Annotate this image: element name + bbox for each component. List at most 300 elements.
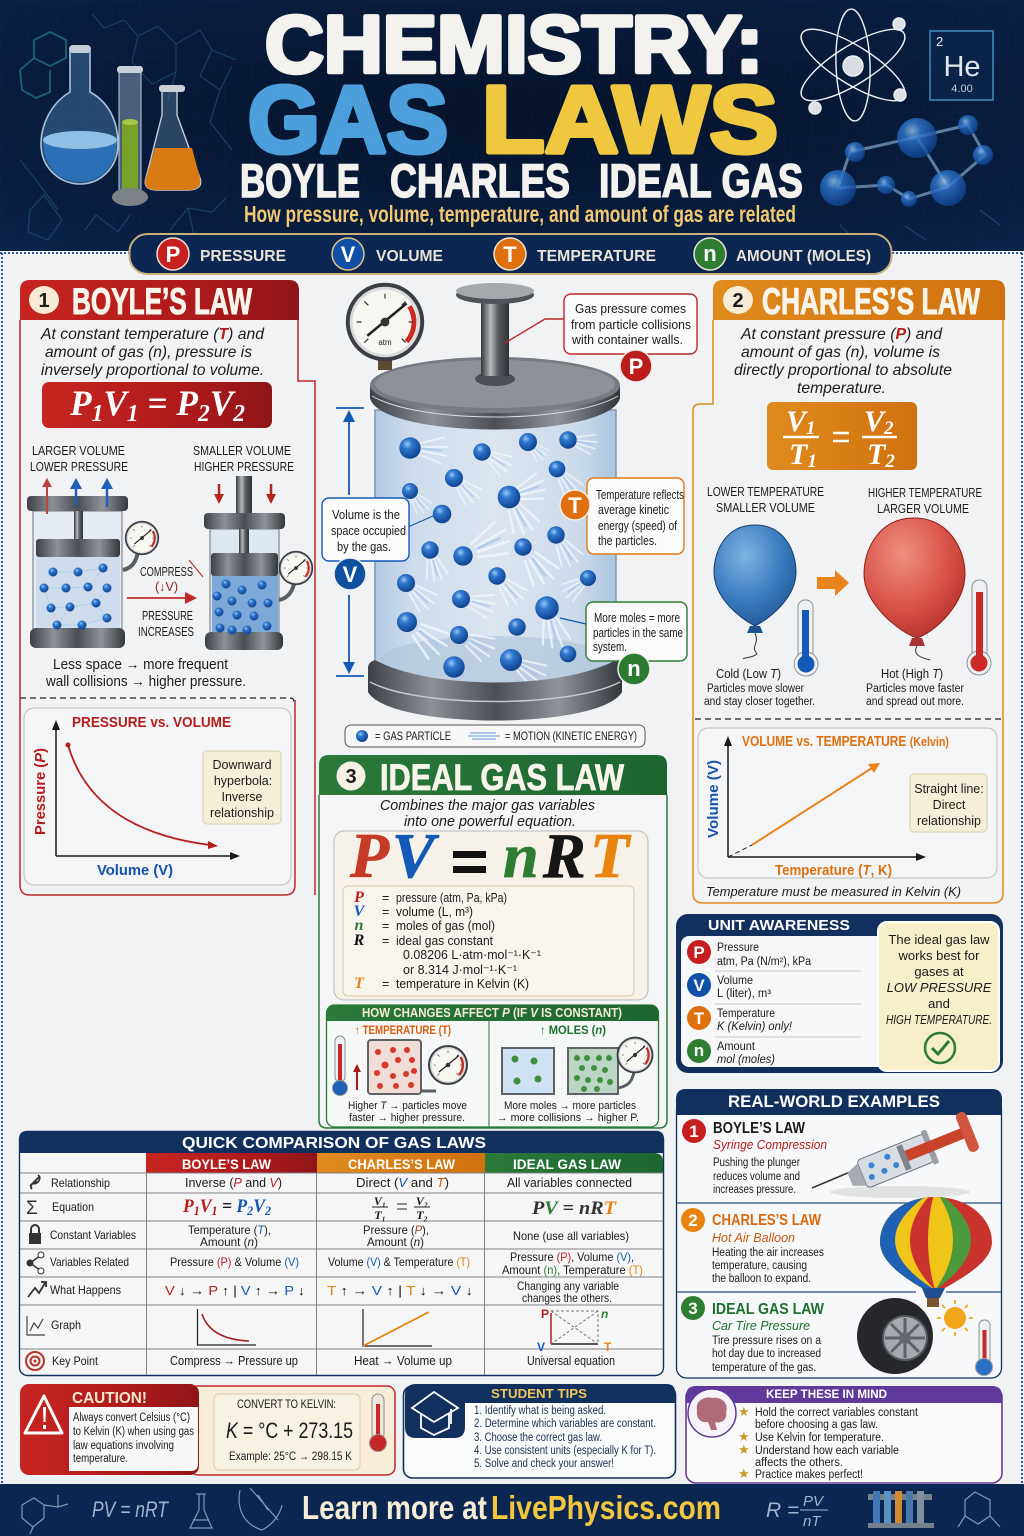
formula: V1/T1 = V2/T2: 2: [883, 418, 894, 439]
variable key: =: [382, 891, 389, 905]
formula: PV = nRT: n: [503, 820, 539, 891]
label: larger volume: [30, 443, 128, 474]
unit: temperature: K (Kelvin) only!: [717, 1021, 793, 1033]
row: equation: =: [218, 1196, 236, 1217]
icon: brain: [688, 1389, 736, 1437]
formula: V1/T1 = V2/T2: 2: [884, 451, 895, 472]
legend: particle and motion: = GAS PARTICLE: [375, 731, 451, 743]
callout: best conditions: works best for: [898, 948, 980, 963]
legend: temperature: [494, 238, 656, 270]
chart: volume vs temperature: VOLUME vs. TEMPERATURE (Kelvin): [742, 734, 949, 750]
unit: pressure: [687, 940, 812, 968]
example: Boyle syringe text: 1: [689, 1122, 699, 1141]
title: [240, 0, 803, 207]
label: lower temperature: [707, 484, 824, 515]
legend: particle and motion: [345, 725, 645, 747]
callout: hyperbola: Inverse: [222, 790, 263, 804]
row: key point: Compress → Pressure up: [170, 1354, 298, 1368]
formula: P1V1 = P2V2: V: [103, 383, 130, 423]
piston rod and knob: [456, 283, 534, 386]
callout: volume: [322, 408, 433, 676]
icon: warning triangle: [25, 1396, 62, 1433]
element card: helium: [930, 31, 993, 100]
unit: amount: Amount: [717, 1039, 756, 1053]
particle motion streaks: [405, 432, 598, 690]
example: Boyle syringe text: increases pressure.: [713, 1184, 796, 1196]
row: what happens: T ↑ → V ↑ | T ↓ → V ↓: [327, 1283, 473, 1298]
mini chart: inverse: [198, 1309, 256, 1345]
text: cold caption: [704, 666, 815, 708]
list: reminders: before choosing a gas law.: [755, 1419, 878, 1431]
formula: V1/T1 = V2/T2: 1: [806, 418, 816, 439]
callout: temperature: T: [568, 493, 582, 518]
formula: P1V1 = P2V2: P: [70, 383, 92, 423]
legend: particle and motion: = MOTION (KINETIC ENERGY): [505, 731, 637, 743]
list: reminders: affects the others.: [755, 1457, 843, 1469]
title: CHEMISTRY:: [265, 0, 763, 90]
row: equation: [26, 1194, 617, 1222]
variable key: temperature in Kelvin (K): [396, 977, 529, 991]
table column headers: [146, 1153, 663, 1173]
panel: caution: [20, 1384, 395, 1475]
arrow: temperature increase: [817, 570, 849, 596]
unit: pressure: P: [693, 943, 705, 962]
variable key: volume (L, m³): [396, 905, 473, 919]
row: what happens: [28, 1279, 619, 1305]
icon: test tube rack: [868, 1491, 934, 1528]
example: Boyle syringe text: reduces volume and: [713, 1171, 800, 1183]
row: equation: P: [182, 1196, 218, 1218]
legend: pressure: [157, 238, 286, 270]
text: cold caption: Particles move slower: [707, 683, 804, 695]
list: student tips: 4. Use consistent units (especially K for T).: [474, 1445, 656, 1457]
example: Boyle syringe text: [682, 1119, 827, 1196]
heading: unit awareness: UNIT AWARENESS: [708, 918, 850, 934]
callout: straight line: Direct: [933, 798, 966, 812]
row: constant variables: Amount (n): [367, 1235, 424, 1249]
callout: temperature: Temperature reflects: [596, 487, 684, 502]
mini chart: all variables: T: [604, 1340, 612, 1354]
text: ideal gas intro: into one powerful equation.: [404, 814, 576, 830]
element card: helium: He: [943, 51, 981, 83]
example: Boyle syringe text: BOYLE’S LAW: [713, 1120, 806, 1137]
diagram: expanded cylinder: [27, 478, 159, 648]
scenario: raise temperature: ↑ TEMPERATURE (T): [355, 1023, 451, 1037]
formula: V1/T1 = V2/T2: T: [867, 438, 885, 471]
row: equation: 2: [246, 1203, 254, 1218]
title: GAS: [248, 67, 448, 173]
icon: hot air balloon: [880, 1197, 992, 1307]
callout: hyperbola: Downward: [212, 758, 272, 772]
label: higher temperature: HIGHER TEMPERATURE: [868, 485, 982, 500]
heading: ideal gas law: IDEAL GAS LAW: [380, 757, 624, 798]
text: Charles definition: temperature.: [797, 380, 886, 397]
callout: pressure: with container walls.: [571, 332, 683, 347]
row: key point: Heat → Volume up: [354, 1354, 452, 1368]
heading: student tips: STUDENT TIPS: [491, 1386, 587, 1401]
row: equation: T₁: [374, 1208, 386, 1222]
call to action: Learn more at: [302, 1489, 487, 1526]
example: Charles balloon text: 2: [688, 1211, 698, 1230]
chart: volume vs temperature: Temperature (T, K): [775, 862, 892, 879]
list: reminders: ★: [738, 1429, 750, 1444]
callout: hyperbola: hyperbola:: [214, 774, 272, 788]
callout: best conditions: and: [928, 996, 950, 1011]
icon: blue balloon: [714, 525, 796, 659]
text: caution body: [73, 1412, 194, 1465]
text: Charles definition: amount of gas (n), volume is: [741, 344, 940, 361]
legend: amount: n: [703, 241, 717, 266]
row: variables related: Variables Related: [50, 1255, 129, 1269]
variable key: ideal gas constant: [396, 934, 494, 948]
table column headers: CHARLES’S LAW: [348, 1156, 456, 1172]
heading: ideal gas law: 3: [345, 766, 357, 788]
legend bar: [130, 234, 892, 274]
element card: helium: 2: [936, 34, 943, 49]
text: cold caption: and stay closer together.: [704, 696, 815, 708]
example: ideal gas tire text: IDEAL GAS LAW: [712, 1301, 825, 1318]
label: higher temperature: LARGER VOLUME: [877, 501, 969, 516]
formula doodle: R = PV/nT: PV: [803, 1493, 825, 1510]
panel: unit awareness: [676, 914, 1003, 1073]
variable key: =: [382, 905, 389, 919]
icon: red balloon: [864, 518, 965, 660]
cylinder base: [368, 660, 622, 720]
callout: best conditions: gases at: [914, 964, 964, 979]
row: variables related: Pressure (P), Volume (V),: [510, 1250, 634, 1264]
heading: table title: QUICK COMPARISON OF GAS LAWS: [182, 1135, 486, 1152]
scenario: add moles: More moles → more particles: [504, 1100, 636, 1112]
callout: pressure: P: [629, 354, 643, 379]
callout: straight line: [910, 774, 987, 832]
unit: amount: n: [694, 1041, 704, 1060]
text: Boyle definition: [40, 326, 265, 379]
scenario: raise temperature: faster → higher pressure.: [349, 1112, 465, 1124]
chart: pressure vs volume: Pressure (P): [32, 748, 49, 835]
callout: volume: Volume is the: [332, 507, 400, 522]
text: caution body: Always convert Celsius (°C): [73, 1412, 190, 1424]
row: equation: P: [235, 1196, 271, 1218]
variable key: pressure (atm, Pa, kPa): [396, 891, 507, 905]
example: ideal gas tire text: [681, 1296, 825, 1374]
row: constant variables: Temperature (T),: [188, 1223, 271, 1237]
text: Boyle explanation: wall collisions → higher pressure.: [45, 674, 246, 690]
row: key point: Universal equation: [527, 1354, 615, 1368]
example: Charles balloon text: CHARLES’S LAW: [712, 1212, 822, 1229]
unit: temperature: T: [694, 1009, 705, 1028]
text: caution body: to Kelvin (K) when using gas: [73, 1426, 194, 1438]
callout: pressure: from particle collisions: [571, 317, 691, 332]
row: variables related: Pressure (P) & Volume (V): [170, 1255, 299, 1269]
text: Charles definition: directly proportional to absolute: [734, 362, 952, 379]
row: equation: 2: [264, 1203, 271, 1218]
legend: volume: VOLUME: [376, 248, 443, 265]
icon: lab flasks: [41, 45, 201, 206]
header banner: [0, 0, 1024, 251]
formula: P1V1 = P2V2: 2: [197, 401, 210, 427]
callout: volume: V: [343, 562, 358, 587]
icon: atom: [792, 8, 914, 122]
row: variables related: Volume (V) & Temperature (T): [328, 1255, 470, 1269]
example: ideal gas tire text: hot day due to increased: [712, 1348, 821, 1360]
mini chart: all variables: P: [541, 1307, 549, 1321]
list: reminders: ★: [738, 1442, 750, 1457]
label: higher temperature: [868, 485, 982, 516]
list: student tips: 5. Solve and check your answer!: [474, 1458, 614, 1470]
heading: table title: [19, 1131, 664, 1153]
diagram: compressed cylinder: [204, 476, 313, 650]
callout: best conditions: LOW PRESSURE: [887, 980, 992, 995]
variable key: T: [354, 975, 365, 992]
heading: Boyle's law: 1: [38, 290, 50, 312]
subpanel: how changes affect pressure: [326, 1005, 658, 1127]
element card: helium: 4.00: [951, 83, 973, 95]
variable key: moles of gas (mol): [396, 919, 495, 933]
subpanel: how changes affect pressure: HOW CHANGES AFFECT P (IF V IS CONSTANT): [362, 1006, 622, 1020]
legend: amount: AMOUNT (MOLES): [736, 248, 871, 265]
unit: pressure: Pressure: [717, 940, 759, 954]
example: ideal gas tire text: temperature of the gas.: [712, 1362, 816, 1374]
list: reminders: ★: [738, 1404, 750, 1419]
row: equation: V₂: [416, 1194, 428, 1208]
diagram: central gas cylinder: [346, 283, 622, 720]
label: compress arrow: INCREASES: [138, 625, 194, 639]
example: Charles balloon text: temperature, causing: [712, 1260, 807, 1272]
unit: volume: Volume: [717, 973, 753, 987]
heading: keep in mind: KEEP THESE IN MIND: [766, 1387, 887, 1401]
row: graph: Graph: [51, 1318, 81, 1332]
callout: temperature: energy (speed) of: [598, 518, 677, 533]
icon: thermometer: [976, 1320, 992, 1376]
heading: Boyle's law: BOYLE’S LAW: [72, 281, 252, 322]
row: relationship: [30, 1175, 632, 1190]
text: ideal gas intro: [380, 798, 595, 830]
formula: Kelvin conversion: [214, 1394, 360, 1470]
row: equation: PV = nRT: [531, 1198, 617, 1219]
scenario: add moles: ↑ MOLES (n): [540, 1023, 606, 1037]
row: key point: [26, 1352, 615, 1370]
title: LAWS: [482, 67, 778, 173]
text: hot caption: [866, 666, 964, 708]
unit: volume: L (liter), m³: [717, 988, 771, 1000]
chart: pressure vs volume: [24, 708, 291, 885]
callout: best conditions: The ideal gas law: [888, 932, 990, 947]
unit: temperature: Temperature: [717, 1006, 775, 1020]
row: constant variables: [29, 1223, 629, 1249]
row: relationship: Relationship: [51, 1176, 110, 1190]
row: constant variables: None (use all variables): [513, 1229, 629, 1243]
formula: PV = nRT: P: [349, 820, 390, 891]
row: constant variables: Constant Variables: [50, 1228, 136, 1242]
unit: amount: mol (moles): [717, 1054, 775, 1066]
variable key: or 8.314 J·mol⁻¹·K⁻¹: [403, 963, 517, 977]
variable key: R: [353, 932, 365, 949]
label: lower temperature: SMALLER VOLUME: [716, 500, 815, 515]
list: student tips: 1. Identify what is being asked.: [474, 1405, 606, 1417]
list: student tips: [474, 1405, 656, 1470]
icon: molecule: [820, 115, 993, 207]
icon: graduation cap: [412, 1392, 458, 1435]
unit: volume: V: [693, 976, 705, 995]
label: smaller volume: HIGHER PRESSURE: [194, 459, 294, 474]
chart: pressure vs volume: PRESSURE vs. VOLUME: [72, 715, 231, 731]
row: variables related: [26, 1250, 643, 1277]
table column headers: IDEAL GAS LAW: [513, 1156, 622, 1172]
callout: temperature: average kinetic: [598, 502, 669, 517]
list: reminders: Practice makes perfect!: [755, 1469, 863, 1481]
variable key: [343, 886, 634, 996]
example: Charles balloon text: Heating the air increases: [712, 1247, 824, 1259]
row: equation: Equation: [52, 1200, 94, 1214]
formula: P1V1 = P2V2: = P: [139, 383, 199, 423]
example: ideal gas tire text: Tire pressure rises on a: [712, 1335, 822, 1347]
heading: real-world examples: REAL-WORLD EXAMPLES: [728, 1093, 940, 1111]
row: relationship: All variables connected: [507, 1176, 632, 1190]
gas particles: [397, 431, 596, 678]
text: Charles definition: [734, 326, 952, 397]
row: relationship: Inverse (P and V): [185, 1176, 282, 1190]
list: reminders: Understand how each variable: [755, 1445, 899, 1457]
heading: Charles's law: 2: [732, 290, 744, 312]
row: constant variables: Amount (n): [200, 1235, 258, 1249]
icon: hot thermometer: [967, 580, 991, 675]
formula doodle: R = PV/nT: [766, 1493, 828, 1530]
list: reminders: Hold the correct variables constant: [755, 1407, 919, 1419]
pressure gauge: [346, 283, 424, 370]
variable key: =: [382, 934, 389, 948]
icon: sun: [937, 1300, 973, 1336]
icon: cold thermometer: [794, 600, 818, 676]
unit: temperature: [687, 1006, 793, 1033]
text: cold caption: Cold (Low T): [716, 666, 781, 681]
row: equation: V: [253, 1196, 266, 1217]
label: compress arrow: COMPRESS: [140, 565, 193, 579]
list: student tips: 3. Choose the correct gas law.: [474, 1432, 602, 1444]
formula: P1V1 = P2V2: V: [210, 383, 236, 423]
panel: real-world examples: [676, 1089, 1002, 1378]
callout: moles: More moles = more: [594, 610, 680, 625]
formula doodle: PV = nRT: PV = nRT: [92, 1497, 169, 1522]
mini chart: all variables: n: [601, 1307, 608, 1321]
panel: student tips: [404, 1384, 676, 1478]
variable key: P: [353, 889, 364, 906]
footer doodles: [22, 1488, 1000, 1534]
formula: V1/T1 = V2/T2: V: [786, 405, 806, 438]
text: Boyle definition: At constant temperature (T) and: [40, 326, 265, 343]
variable key: 0.08206 L·atm·mol⁻¹·K⁻¹: [403, 948, 541, 962]
legend: amount: [694, 238, 871, 270]
row: what happens: Changing any variable: [517, 1279, 619, 1293]
scenario: raise temperature: [332, 1023, 468, 1124]
callout: temperature: [560, 478, 684, 554]
callout: straight line: relationship: [917, 814, 981, 828]
example: Boyle syringe text: Pushing the plunger: [713, 1157, 800, 1169]
legend: volume: [332, 238, 443, 270]
mini chart: all variables: [537, 1307, 612, 1354]
row: graph: [27, 1307, 612, 1354]
text: Boyle definition: inversely proportional to volume.: [41, 362, 264, 379]
formula: PV = nRT: V: [392, 820, 440, 891]
formula: V1/T1 = V2/T2: 1: [807, 451, 817, 472]
text: caution body: temperature.: [73, 1453, 128, 1465]
example: Boyle syringe text: Syringe Compression: [713, 1137, 827, 1152]
cylinder lid: [370, 357, 620, 430]
callout: hyperbola: relationship: [210, 806, 274, 820]
title: BOYLE: [240, 154, 360, 207]
callout: straight line: Straight line:: [914, 782, 984, 796]
row: key point: Key Point: [52, 1354, 99, 1368]
list: reminders: Use Kelvin for temperature.: [755, 1432, 884, 1444]
example: Charles balloon text: Hot Air Balloon: [712, 1230, 795, 1245]
label: smaller volume: SMALLER VOLUME: [193, 443, 291, 458]
unit: amount: [687, 1039, 775, 1066]
list: reminders: ★: [738, 1466, 750, 1481]
formula: Kelvin conversion: Example: 25°C → 298.15 K: [229, 1449, 352, 1463]
callout: moles: particles in the same: [593, 625, 683, 640]
callout: volume: space occupied: [331, 523, 406, 538]
text: Charles definition: At constant pressure (P) and: [740, 326, 943, 343]
row: equation: V: [200, 1196, 213, 1217]
heading: real-world examples: [676, 1089, 1002, 1115]
formula doodle: R = PV/nT: nT: [803, 1513, 822, 1530]
row: what happens: What Happens: [50, 1283, 121, 1297]
icon: thermometer: [370, 1394, 386, 1452]
text: hot caption: Hot (High T): [881, 666, 943, 681]
table column headers: BOYLE’S LAW: [182, 1156, 272, 1172]
heading: caution: CAUTION!: [72, 1390, 147, 1407]
callout: best conditions: [878, 922, 999, 1071]
scenario: raise temperature: Higher T → particles move: [348, 1100, 467, 1112]
text: caution body: law equations involving: [73, 1440, 174, 1452]
row: constant variables: Pressure (P),: [363, 1223, 429, 1237]
row: equation: Σ: [26, 1198, 38, 1219]
panel: Boyle's law: [20, 280, 315, 895]
example: Charles balloon text: [681, 1208, 824, 1285]
label: compress arrow: PRESSURE: [142, 609, 193, 623]
text: ideal gas intro: Combines the major gas variables: [380, 798, 595, 814]
mini chart: all variables: V: [537, 1340, 545, 1354]
formula: P1V1 = P2V2: 1: [127, 401, 139, 427]
icon: car tire: [857, 1298, 933, 1374]
formula: P1V1 = P2V2: 2: [232, 401, 245, 427]
formula: PV = nRT: [334, 820, 648, 1000]
row: equation: T₂: [416, 1208, 428, 1222]
callout: pressure: [505, 294, 697, 382]
callout: moles: n: [627, 656, 641, 681]
legend: temperature: T: [503, 242, 517, 267]
scenario: add moles: [497, 1023, 653, 1124]
callout: moles: [560, 602, 687, 685]
list: student tips: 2. Determine which variables are constant.: [474, 1418, 656, 1430]
row: what happens: V ↓ → P ↑ | V ↑ → P ↓: [165, 1283, 305, 1298]
panel: keep these in mind: [686, 1386, 1002, 1483]
row: what happens: changes the others.: [522, 1291, 612, 1305]
example: ideal gas tire text: Car Tire Pressure: [712, 1318, 810, 1333]
scenario: add moles: → more collisions → higher P.: [497, 1112, 639, 1124]
subtitle: How pressure, volume, temperature, and amount of gas are related: [244, 201, 796, 227]
footer: [0, 1484, 1024, 1536]
title: IDEAL GAS: [599, 154, 803, 207]
formula: Kelvin conversion: K = °C + 273.15: [226, 1418, 353, 1443]
label: larger volume: LOWER PRESSURE: [30, 459, 128, 474]
row: variables related: Amount (n), Temperature (T): [502, 1263, 643, 1277]
callout: pressure: Gas pressure comes: [575, 301, 686, 316]
call to action: LivePhysics.com: [491, 1489, 721, 1526]
formula: P1V1 = P2V2: 1: [92, 401, 103, 427]
formula: PV = nRT: T: [590, 820, 632, 891]
row: equation: 1: [194, 1203, 200, 1218]
label: larger volume: LARGER VOLUME: [32, 443, 125, 458]
